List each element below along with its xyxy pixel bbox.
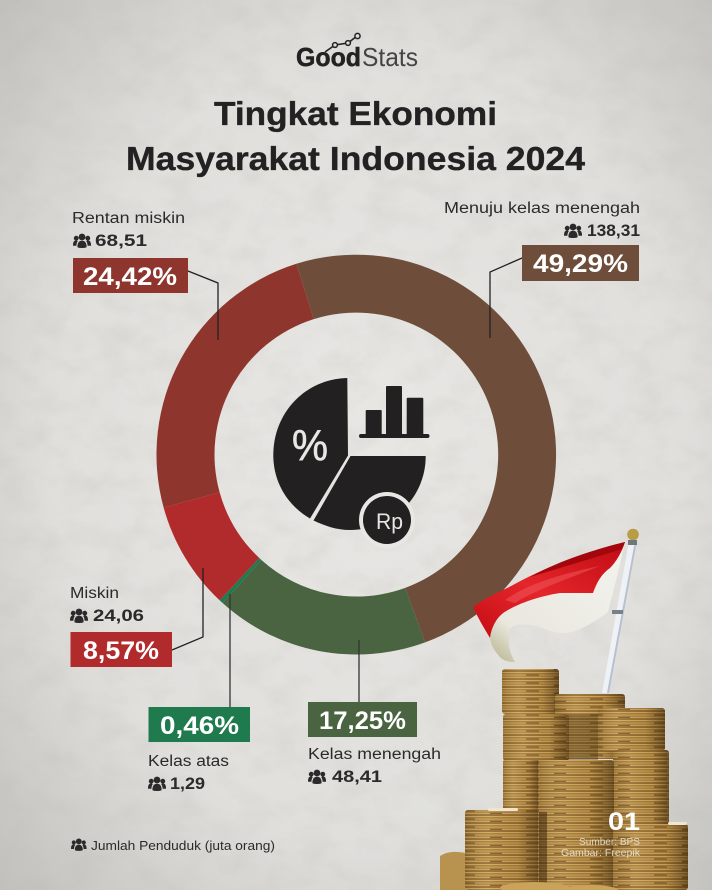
label: menuju kelas menengah: 49,29% <box>533 250 628 278</box>
label: menuju kelas menengah <box>444 200 640 338</box>
title: Masyarakat Indonesia 2024 <box>126 140 586 177</box>
label: kelas menengah: Kelas menengah <box>308 746 441 763</box>
segment: kelas atas 0,46% <box>220 558 261 603</box>
donut chart <box>156 255 556 655</box>
label: miskin: 24,06 <box>93 606 144 625</box>
logo: GoodStats: Good <box>296 42 361 72</box>
label: rentan miskin: 24,42% <box>83 263 177 291</box>
label: kelas menengah: 48,41 <box>332 767 382 786</box>
flag: Indonesia <box>473 542 625 662</box>
icon: pie with percent, bars and rupiah: % <box>292 421 328 470</box>
label: rentan miskin: Rentan miskin <box>72 210 185 227</box>
label: kelas atas: 0,46% <box>160 712 239 740</box>
page number and sources: 01 <box>608 808 640 836</box>
illustration: stacks of gold coins <box>440 669 688 890</box>
legend: jumlah penduduk: Jumlah Penduduk (juta orang) <box>91 839 275 853</box>
segment: kelas menengah 17,25% <box>223 560 425 655</box>
label: kelas atas: 1,29 <box>170 774 205 793</box>
label: rentan miskin: 68,51 <box>95 231 147 250</box>
icon: pie with percent, bars and rupiah <box>273 378 430 548</box>
segment: miskin 8,57% <box>164 492 259 600</box>
label: kelas menengah <box>308 640 441 786</box>
label: miskin: Miskin <box>70 585 119 602</box>
page number and sources: Sumber: BPS <box>579 837 640 848</box>
label: kelas atas <box>148 594 250 793</box>
segment: menuju kelas menengah 49,29% <box>296 255 556 642</box>
title: Tingkat Ekonomi <box>214 95 497 132</box>
logo: GoodStats <box>296 33 418 72</box>
title <box>126 95 586 177</box>
label: rentan miskin <box>72 210 218 340</box>
label: miskin: 8,57% <box>83 637 159 665</box>
logo: GoodStats: Stats <box>362 42 418 72</box>
segment: rentan miskin 24,42% <box>156 264 314 508</box>
page number and sources: Gambar: Freepik <box>561 848 641 859</box>
page number and sources <box>561 808 641 859</box>
label: kelas menengah: 17,25% <box>319 707 406 735</box>
label: menuju kelas menengah: 138,31 <box>587 221 640 240</box>
flag pole <box>602 529 639 693</box>
label: menuju kelas menengah: Menuju kelas menengah <box>444 200 640 217</box>
icon: pie with percent, bars and rupiah: Rp <box>376 509 403 534</box>
label: kelas atas: Kelas atas <box>148 753 229 770</box>
label: miskin <box>70 568 203 667</box>
